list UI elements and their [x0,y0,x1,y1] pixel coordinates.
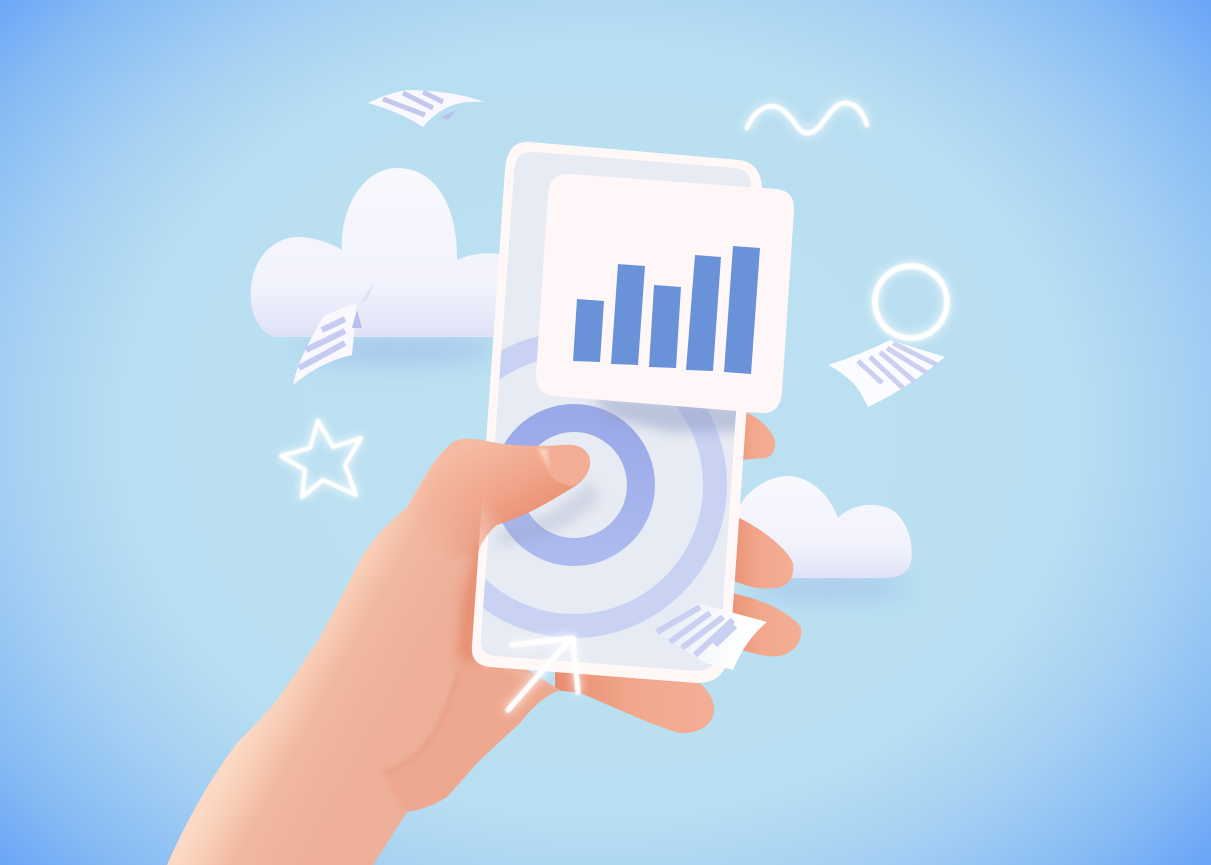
paper: right under ring [828,340,945,407]
hand: fingers behind phone [555,412,801,733]
concentric rings on screen [483,336,736,638]
thenar shading [386,660,556,812]
paper: left of phone [293,280,375,385]
neon squiggle [747,103,867,133]
hand: thumb [425,438,590,558]
shadow beside phone [466,545,486,660]
neon arrow on phone [508,638,578,710]
thumb nail [537,445,590,486]
neon star [281,421,361,497]
cloud: small right [730,476,912,598]
paper: top flying sheet [368,90,485,127]
hand: palm and wrist [167,440,560,865]
cloud: large left [251,168,500,363]
phone [472,142,762,683]
chart card [536,174,794,413]
neon ring [875,266,947,338]
crease [383,672,458,773]
bar chart [573,246,760,374]
paper: bottom on phone [657,603,767,670]
thumb shadow on screen [495,480,600,545]
